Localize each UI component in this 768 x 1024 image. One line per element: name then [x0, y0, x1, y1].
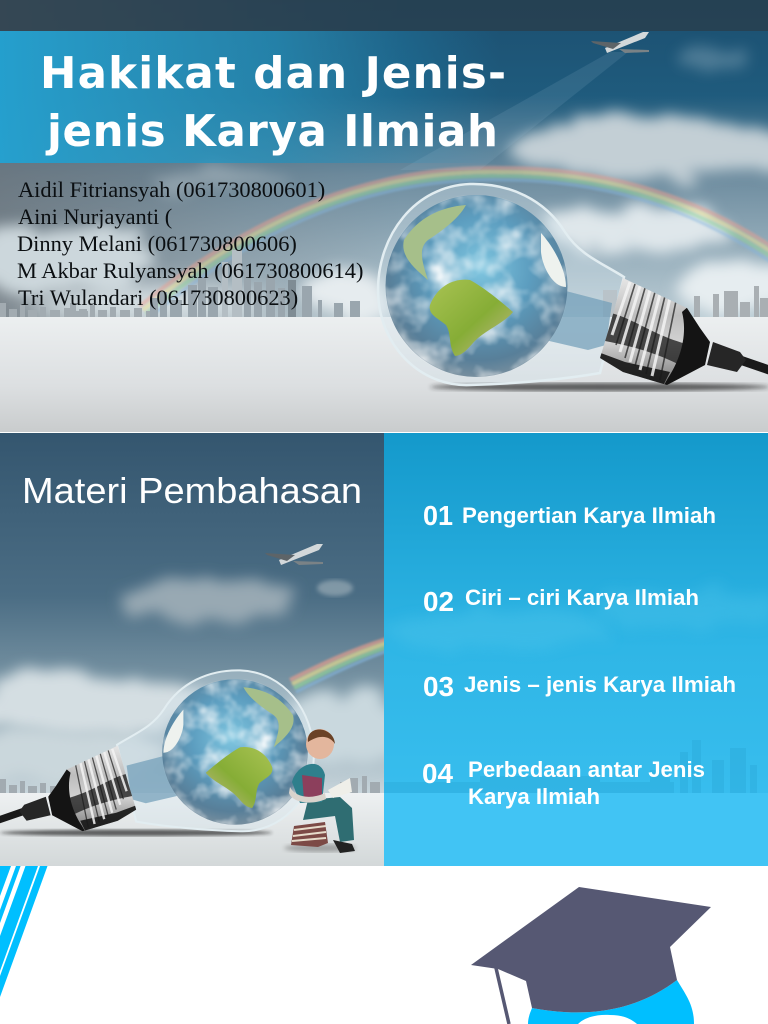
author names: Aini Nurjayanti (: [18, 204, 172, 229]
list item 01: Pengertian Karya Ilmiah: [462, 503, 716, 528]
clouds: [0, 578, 405, 785]
corner stripes: [0, 866, 48, 997]
author names: Dinny Melani (061730800606): [17, 231, 297, 256]
list item 04: [422, 757, 705, 809]
rainbow: [140, 168, 768, 318]
list item 04: 04: [422, 758, 453, 789]
sky background: [0, 0, 768, 320]
sky background: [0, 433, 384, 795]
faded clouds and skyline: [384, 588, 768, 814]
title band: [0, 31, 500, 163]
panel: next slide: [0, 866, 768, 1024]
illustration: boy reading on books: [284, 729, 356, 853]
list item 02: 02: [423, 586, 454, 617]
airplane: [265, 544, 323, 565]
icon: light bulb with earth globe: [378, 184, 768, 392]
list item 04: Perbedaan antar Jenis: [468, 757, 705, 782]
airplane with vapour trail: [400, 32, 649, 170]
icon: graduate with mortarboard: [471, 887, 711, 1024]
heading: Materi Pembahasan: [22, 470, 362, 511]
author names: Tri Wulandari (061730800623): [18, 285, 298, 310]
list item 02: [424, 589, 698, 612]
icon: light bulb with earth globe: [0, 670, 314, 837]
list item 03: 03: [423, 671, 454, 702]
floor: [0, 317, 768, 432]
author names: Aidil Fitriansyah (061730800601): [18, 177, 325, 202]
list item 01: 01: [423, 500, 453, 531]
city skyline: [0, 776, 380, 793]
author names: M Akbar Rulyansyah (061730800614): [17, 258, 363, 283]
rainbow: [290, 638, 390, 692]
panel: agenda image: [0, 433, 405, 866]
city skyline left: [0, 250, 360, 317]
blue background: [384, 433, 768, 793]
panel: agenda list: [384, 433, 768, 866]
city skyline right: [603, 286, 768, 317]
panel: cover slide: [0, 0, 768, 432]
list item 02: Ciri – ciri Karya Ilmiah: [465, 585, 699, 610]
floor: [0, 793, 384, 866]
clouds: [0, 118, 768, 325]
list item 04: Karya Ilmiah: [468, 784, 600, 809]
title: Hakikat dan Jenis-: [40, 49, 506, 99]
list item 03: Jenis – jenis Karya Ilmiah: [464, 672, 736, 697]
top dark bar: [0, 0, 768, 31]
title: jenis Karya Ilmiah: [45, 107, 498, 157]
